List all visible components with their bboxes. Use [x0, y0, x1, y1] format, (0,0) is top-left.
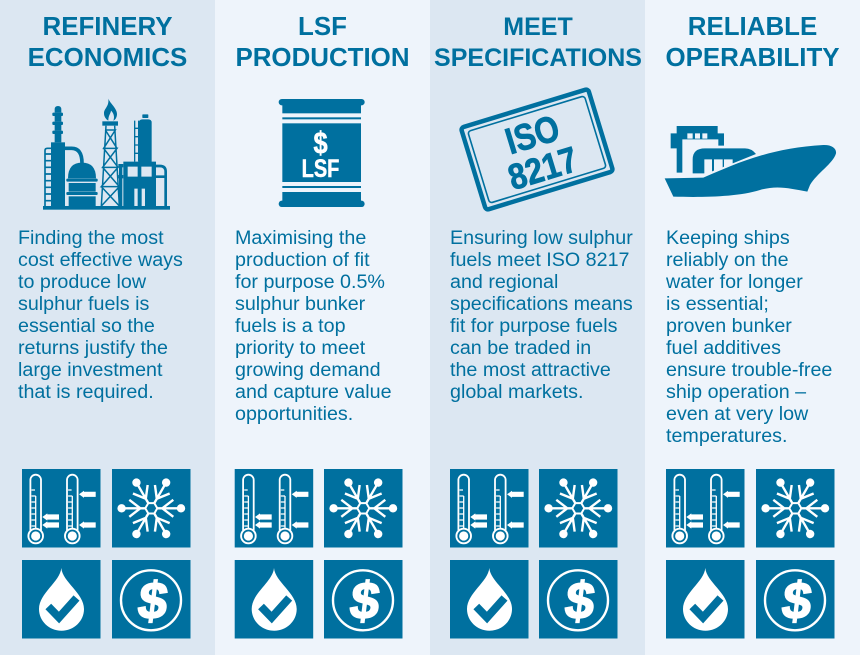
icon tile: refinery dollar: $ [135, 573, 171, 630]
text: LSF production description [235, 227, 392, 425]
panel: refinery economics background [0, 0, 215, 655]
panel: reliable operability background [645, 0, 860, 655]
heading: meet specifications: SPECIFICATIONS [434, 44, 642, 72]
icon tile: refinery fuel drop [22, 560, 100, 638]
icon tile: specifications thermometers [450, 469, 528, 548]
icon: ship [665, 126, 836, 197]
text: refinery economics description: cost effective ways [18, 249, 183, 271]
icon tile: specifications dollar: $ [562, 573, 598, 630]
icon tile: operability dollar [756, 560, 834, 638]
text: dollar on barrel: $ [313, 126, 328, 161]
text: reliable operability description: reliably on the [666, 249, 789, 271]
text: meet specifications description: fit for purpose fuels [450, 315, 617, 337]
heading: reliable operability: OPERABILITY [665, 44, 840, 72]
text: reliable operability description: fuel additives [666, 337, 781, 359]
text: meet specifications description: the most attractive [450, 359, 611, 381]
text: LSF production description: fuels is a top [235, 315, 346, 337]
icon tile: specifications snowflake [539, 469, 618, 548]
text: refinery economics description [18, 227, 183, 403]
text: ISO: ISO [501, 107, 564, 162]
text: reliable operability description: ensure trouble-free [666, 359, 832, 381]
heading: reliable operability [665, 13, 840, 72]
icon tile: operability dollar: $ [779, 573, 815, 630]
text: refinery economics description: that is required. [18, 381, 154, 403]
icon tile: refinery dollar [112, 560, 190, 638]
text: LSF production description: priority to meet [235, 337, 365, 359]
icon tile: LSF dollar [324, 560, 402, 638]
text: meet specifications description [450, 227, 633, 403]
icon: ISO 8217 stamp [461, 89, 613, 210]
icon tile: LSF snowflake [324, 469, 402, 548]
text: refinery economics description: sulphur fuels is [18, 293, 149, 315]
text: meet specifications description: Ensuring low sulphur [450, 227, 633, 249]
heading: refinery economics [28, 13, 187, 72]
text: LSF on barrel: LSF [302, 155, 339, 183]
text: reliable operability description: ship operation – [666, 381, 806, 403]
panel: meet specifications background [430, 0, 645, 655]
icon tile: refinery snowflake [112, 469, 190, 548]
icon: LSF barrel [279, 99, 365, 207]
icon tile: LSF fuel drop [235, 560, 313, 638]
text: meet specifications description: fuels meet ISO 8217 [450, 249, 629, 271]
panel: LSF production background [215, 0, 430, 655]
icon tile: refinery thermometers [22, 469, 100, 548]
icon tile: specifications dollar [539, 560, 618, 638]
text: reliable operability description: water for longer [666, 271, 803, 293]
icon: refinery [43, 99, 170, 210]
text: refinery economics description: to produce low [18, 271, 146, 293]
heading: refinery economics: ECONOMICS [28, 44, 187, 72]
text: reliable operability description: temperatures. [666, 425, 787, 447]
text: reliable operability description: is essential; [666, 293, 769, 315]
heading: LSF production: PRODUCTION [235, 44, 410, 72]
icon tile: specifications fuel drop [450, 560, 528, 638]
icon tile: LSF dollar: $ [347, 573, 383, 630]
icon tile: operability fuel drop [666, 560, 744, 638]
text: LSF production description: Maximising the [235, 227, 366, 249]
text: refinery economics description: essential so the [18, 315, 155, 337]
text: LSF production description: for purpose 0.5% [235, 271, 385, 293]
heading: reliable operability: RELIABLE [688, 13, 817, 41]
text: reliable operability description: proven bunker [666, 315, 792, 337]
text: refinery economics description: large investment [18, 359, 162, 381]
text: LSF production description: sulphur bunker [235, 293, 365, 315]
text: LSF production description: and capture value [235, 381, 392, 403]
icon tile: LSF thermometers [235, 469, 313, 548]
icon tile: operability thermometers [666, 469, 744, 548]
text: reliable operability description [666, 227, 832, 447]
text: LSF production description: growing demand [235, 359, 381, 381]
heading: LSF production [235, 13, 410, 72]
text: reliable operability description: even at very low [666, 403, 808, 425]
text: meet specifications description: global markets. [450, 381, 584, 403]
heading: LSF production: LSF [298, 13, 347, 41]
text: refinery economics description: returns justify the [18, 337, 168, 359]
icon tile: operability snowflake [756, 469, 834, 548]
text: 8217: 8217 [503, 138, 582, 198]
heading: meet specifications [434, 13, 642, 72]
text: refinery economics description: Finding the most [18, 227, 164, 249]
heading: refinery economics: REFINERY [43, 13, 172, 41]
text: reliable operability description: Keeping ships [666, 227, 790, 249]
text: meet specifications description: and regional [450, 271, 558, 293]
text: meet specifications description: specifications means [450, 293, 633, 315]
text: LSF production description: opportunities. [235, 403, 353, 425]
text: LSF production description: production of fit [235, 249, 370, 271]
heading: meet specifications: MEET [503, 13, 573, 41]
text: meet specifications description: can be traded in [450, 337, 591, 359]
